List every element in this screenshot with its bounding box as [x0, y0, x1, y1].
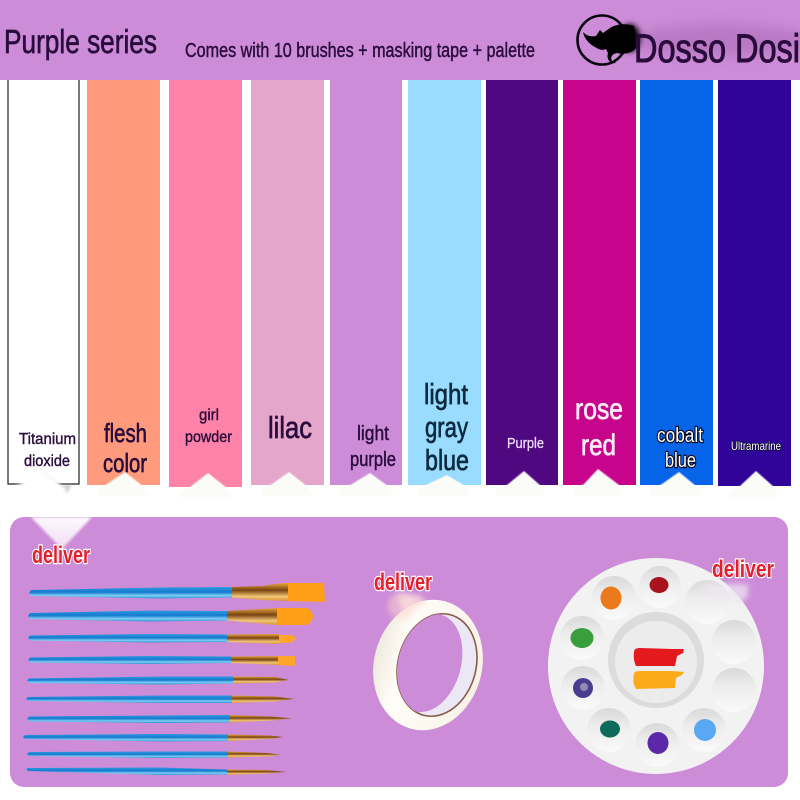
- brush 4: [28, 656, 295, 666]
- paint palette: [548, 558, 764, 774]
- swatch: cobalt blue: [640, 80, 713, 485]
- brush 2: [28, 608, 313, 625]
- color swatches: [8, 80, 791, 496]
- swatch: lilac: lilac: [268, 410, 312, 445]
- swatch: girl powder: powder: [185, 429, 233, 446]
- swatch: light gray blue: gray: [425, 412, 468, 444]
- swatch: Ultramarine: Ultramarine: [731, 439, 781, 453]
- swatch: rose red: red: [581, 429, 616, 462]
- deliver glow marks: [398, 584, 748, 612]
- swatch: flesh color: [87, 80, 160, 485]
- title: Purple series: [4, 23, 157, 60]
- swatch: Titanium dioxide: Titanium: [19, 431, 76, 448]
- brush 1: [29, 583, 325, 602]
- swatch: light gray blue: light: [424, 379, 468, 411]
- palette wells: [560, 566, 756, 767]
- swatch: lilac: [251, 80, 324, 485]
- brush 7: [27, 715, 292, 723]
- swatch: flesh color: color: [103, 448, 147, 478]
- swatch notches: [98, 469, 778, 497]
- swatch: cobalt blue: blue: [665, 450, 696, 472]
- swatch: rose red: [563, 80, 636, 485]
- header band: [0, 0, 800, 80]
- swatch: light gray blue: blue: [425, 445, 469, 477]
- brush 6: [26, 696, 294, 703]
- panel notch: [31, 517, 92, 549]
- swatch: rose red: rose: [575, 393, 623, 426]
- brush 9: [27, 752, 282, 758]
- swatch: Titanium dioxide: [8, 80, 79, 496]
- deliver label: brushes: deliver: [32, 542, 90, 569]
- brush 10: [26, 768, 286, 775]
- deliver label: palette: deliver: [712, 556, 774, 583]
- swatch: cobalt blue: cobalt: [657, 425, 703, 447]
- brand logo: [578, 16, 800, 71]
- brush 8: [23, 734, 283, 742]
- paint dabs: [570, 577, 716, 754]
- deliver label: tape: deliver: [374, 569, 432, 596]
- swatch: Ultramarine: [718, 80, 791, 486]
- swatch: light purple: [330, 80, 402, 485]
- swatch: flesh color: flesh: [104, 418, 147, 448]
- swatch: Titanium dioxide: dioxide: [24, 453, 70, 470]
- swatch: Purple: Purple: [507, 435, 544, 452]
- subtitle: Comes with 10 brushes + masking tape + palette: [185, 40, 535, 62]
- swatch: light purple: light: [357, 423, 389, 445]
- brushes: [23, 583, 325, 775]
- brush 3: [28, 634, 296, 644]
- swatch: Purple: [486, 80, 558, 485]
- brush 5: [27, 676, 289, 684]
- swatch: light gray blue: [408, 80, 481, 485]
- swatch: light purple: purple: [350, 449, 396, 471]
- swatch: girl powder: [169, 80, 242, 487]
- swatch: girl powder: girl: [199, 407, 219, 424]
- panel: included accessories: [10, 517, 788, 787]
- masking tape roll: [373, 590, 483, 730]
